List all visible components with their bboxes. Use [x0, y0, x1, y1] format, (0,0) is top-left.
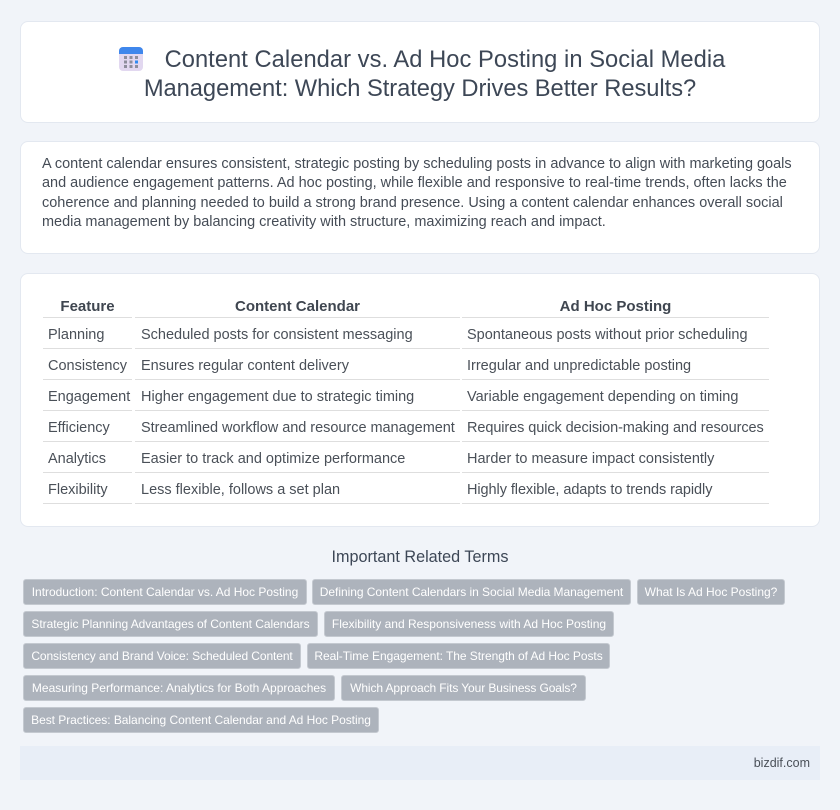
related terms tags [23, 579, 785, 733]
related terms tags: Which Approach Fits Your Business Goals? [350, 681, 577, 695]
text: Harder to measure impact consistently [467, 451, 714, 467]
comparison table panel [20, 273, 820, 527]
row: Analytics [48, 451, 714, 467]
row: Planning [48, 327, 748, 343]
row: Flexibility [48, 482, 712, 498]
row: Engagement [48, 389, 738, 405]
text: Streamlined workflow and resource management [141, 420, 455, 436]
comparison table [43, 317, 769, 504]
text: Ensures regular content delivery [141, 358, 349, 374]
intro text panel [20, 141, 820, 254]
row: Flexibility: Flexibility [48, 482, 108, 498]
related terms tags: Introduction: Content Calendar vs. Ad Hoc Posting [32, 585, 298, 599]
row: Analytics: Analytics [48, 451, 106, 467]
row: Consistency [48, 358, 691, 374]
title panel [20, 21, 820, 123]
related terms tags: What Is Ad Hoc Posting? [645, 585, 777, 599]
related terms tags: Real-Time Engagement: The Strength of Ad Hoc Posts [314, 649, 603, 663]
related terms tags: Flexibility and Responsiveness with Ad Hoc Posting [332, 617, 606, 631]
intro text: and audience engagement patterns. Ad hoc posting, while flexible and responsive to real-time trends, often lacks the [42, 175, 787, 191]
related terms heading: Important Related Terms [332, 548, 508, 566]
text: Less flexible, follows a set plan [141, 482, 340, 498]
table header: Content Calendar: Content Calendar [235, 298, 360, 315]
related terms tags: Defining Content Calendars in Social Media Management [320, 585, 623, 599]
footer bar [20, 746, 820, 780]
related terms tags: Strategic Planning Advantages of Content Calendars [31, 617, 310, 631]
table header: Feature: Feature [60, 298, 115, 315]
text: Higher engagement due to strategic timing [141, 389, 414, 405]
related terms tags: Best Practices: Balancing Content Calendar and Ad Hoc Posting [31, 713, 371, 727]
text: Requires quick decision-making and resources [467, 420, 764, 436]
icon: calendar [119, 47, 143, 71]
footer source: bizdif.com [754, 756, 810, 770]
row: Efficiency: Efficiency [48, 420, 110, 436]
intro text [42, 156, 792, 230]
title: Content Calendar vs. Ad Hoc Posting in Social Media [165, 47, 725, 73]
text: Variable engagement depending on timing [467, 389, 738, 405]
text: Irregular and unpredictable posting [467, 358, 691, 374]
intro text: media management by balancing creativity with structure, maximizing reach and impact. [42, 214, 606, 230]
row: Efficiency [48, 420, 764, 436]
text: Scheduled posts for consistent messaging [141, 327, 413, 343]
row: Engagement: Engagement [48, 389, 130, 405]
title [144, 47, 726, 102]
text: Highly flexible, adapts to trends rapidly [467, 482, 712, 498]
title: Management: Which Strategy Drives Better Results? [144, 76, 696, 102]
row: Consistency: Consistency [48, 358, 127, 374]
related terms tags: Measuring Performance: Analytics for Both Approaches [32, 681, 326, 695]
related terms tags: Consistency and Brand Voice: Scheduled Content [31, 649, 293, 663]
row: Planning: Planning [48, 327, 104, 343]
table header: Ad Hoc Posting: Ad Hoc Posting [560, 298, 671, 315]
text: Spontaneous posts without prior scheduling [467, 327, 748, 343]
intro text: coherence and planning needed to build a strong brand presence. Using a content calendar enhances overall social [42, 195, 783, 211]
text: Easier to track and optimize performance [141, 451, 405, 467]
intro text: A content calendar ensures consistent, strategic posting by scheduling posts in advance to align with marketing goals [42, 156, 792, 172]
